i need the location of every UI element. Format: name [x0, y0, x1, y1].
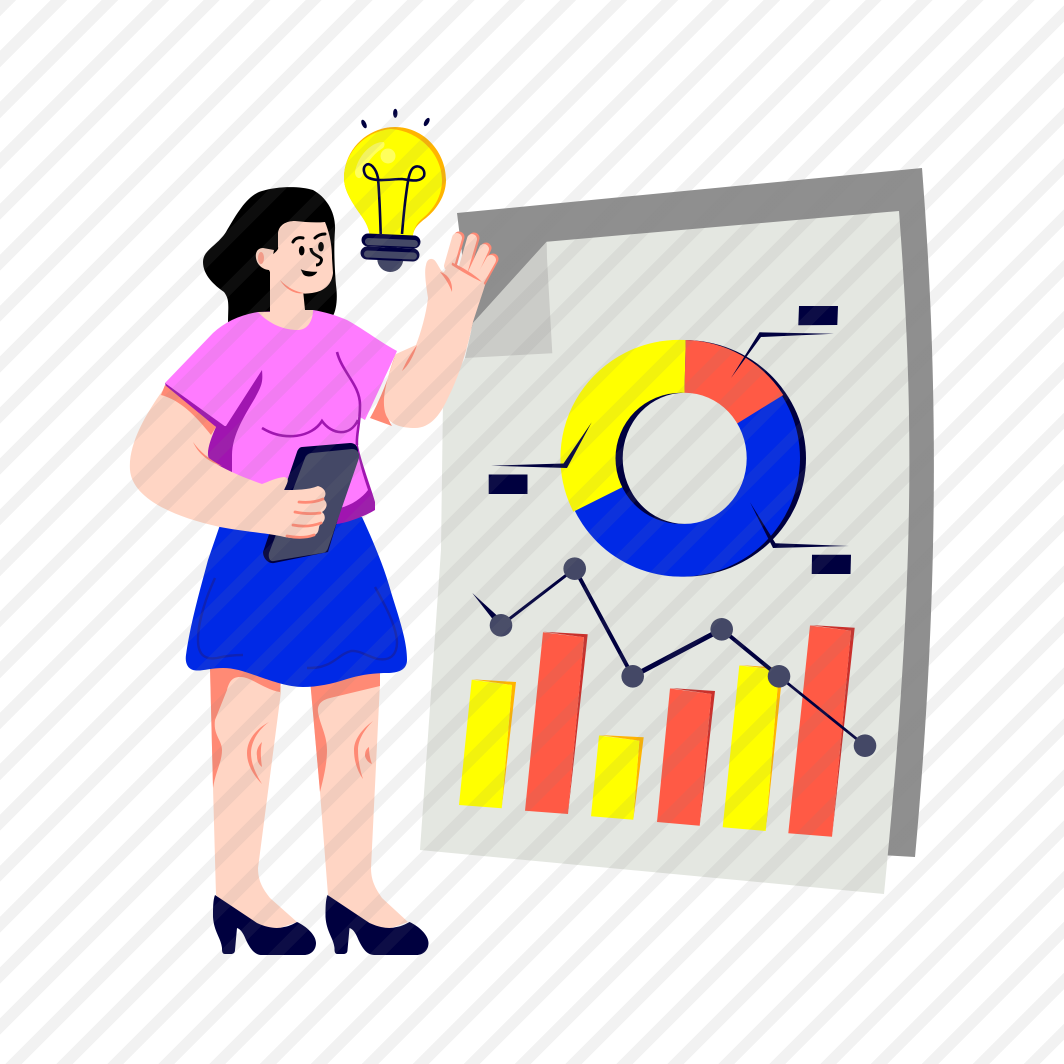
shoe: left	[213, 895, 316, 955]
leg: right	[309, 668, 408, 935]
bar 1	[459, 679, 516, 808]
bulb cap	[377, 246, 403, 272]
panel: report sheet with charts	[420, 168, 934, 894]
eyes	[299, 242, 324, 256]
callout: bottom right	[750, 502, 851, 574]
red segment	[683, 340, 783, 457]
donut hole	[623, 393, 747, 524]
bulb glass	[344, 129, 442, 236]
leg: left	[210, 668, 297, 935]
shoe: right	[326, 895, 428, 955]
bar 6	[788, 625, 855, 837]
bulb rays	[360, 109, 431, 129]
bar chart	[459, 625, 855, 837]
bar 5	[723, 665, 783, 831]
person	[130, 187, 493, 955]
shirt body	[165, 310, 397, 508]
skirt	[186, 517, 407, 687]
bulb base top	[361, 233, 421, 249]
shirt side shade	[205, 370, 262, 475]
front sheet	[420, 211, 909, 894]
tablet	[263, 443, 359, 563]
bar 4	[657, 688, 715, 826]
nose	[311, 248, 322, 265]
bulb rim	[344, 127, 446, 236]
palm and forearm	[384, 259, 485, 428]
line chart	[472, 557, 876, 757]
bulb highlights	[355, 142, 396, 178]
back sheet	[457, 168, 934, 857]
jaw shadow	[280, 280, 304, 293]
forearm shadow	[370, 353, 396, 426]
neck and collar	[258, 268, 313, 330]
bar 2	[525, 632, 588, 814]
callout: top right	[731, 306, 838, 378]
face	[268, 221, 333, 294]
filament	[364, 164, 424, 234]
bulb base bottom	[360, 246, 420, 262]
sleeve edge	[165, 383, 226, 427]
donut chart	[560, 340, 806, 577]
eyebrows	[293, 238, 303, 242]
ear	[256, 248, 274, 270]
icon: light bulb	[344, 109, 446, 272]
callout: left	[489, 422, 592, 494]
shirt fold lines	[337, 352, 360, 445]
folded corner	[465, 242, 552, 358]
palm creases	[452, 262, 482, 282]
elbow crease	[193, 442, 222, 466]
raised arm and hand	[370, 237, 493, 428]
underarm shadow	[161, 385, 216, 435]
elbow mark	[402, 345, 417, 371]
finger lines	[287, 499, 323, 537]
fingers	[449, 237, 493, 283]
inner shadow	[616, 393, 746, 524]
shirt	[165, 310, 397, 524]
yellow segment	[560, 340, 686, 512]
donut shadow ring	[562, 340, 806, 577]
arm holding tablet	[130, 385, 327, 538]
bar 3	[591, 735, 644, 820]
hair	[203, 187, 337, 325]
mouth	[301, 269, 317, 276]
shirt hem shade	[250, 440, 375, 524]
blue segment	[562, 340, 800, 577]
